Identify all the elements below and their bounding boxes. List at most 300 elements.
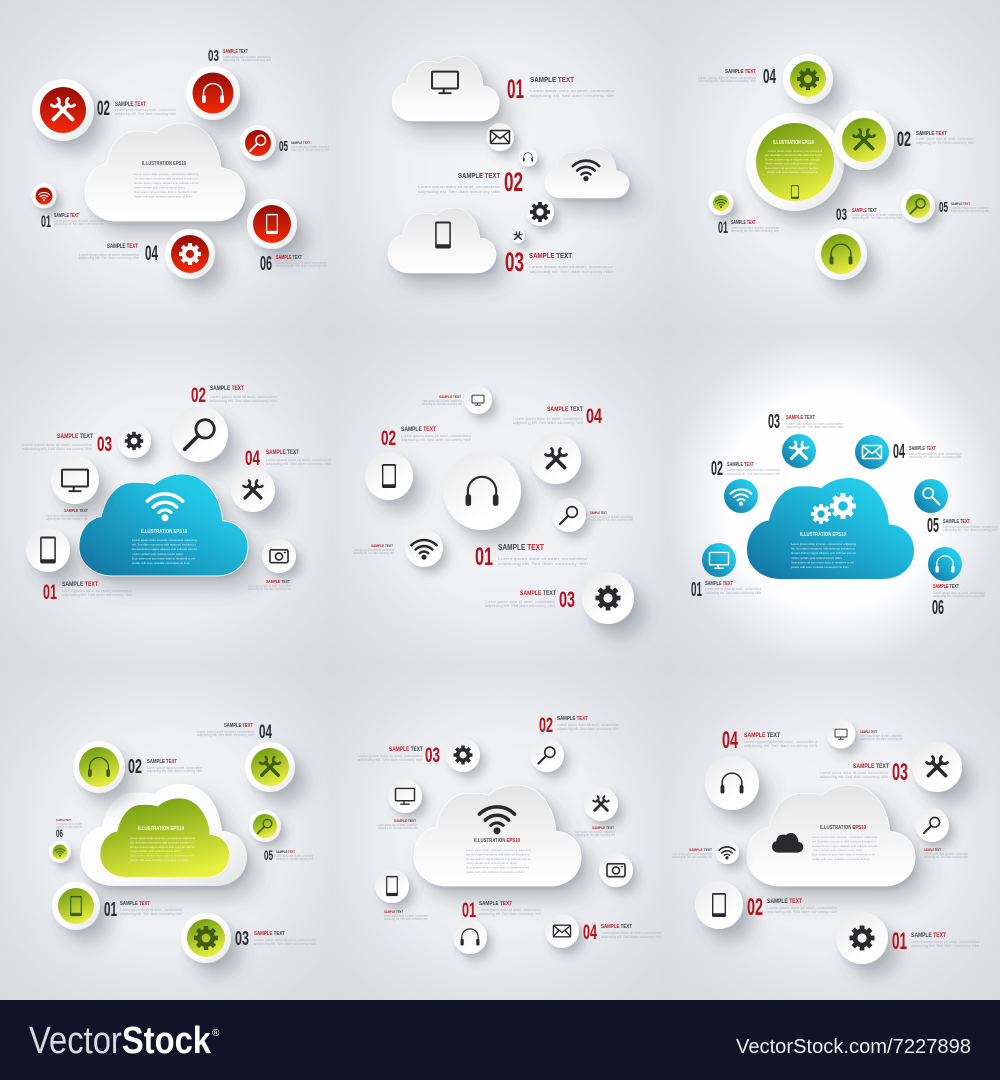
label 01: 01	[507, 74, 524, 104]
cloud: white with green inset: elit. Sed diam nonummy nibh euismod tincidunt ut	[130, 840, 194, 844]
label 02: 02	[128, 756, 142, 778]
icon: gear	[783, 54, 833, 104]
icon: gear	[582, 572, 634, 624]
label 02	[897, 128, 975, 151]
label 01	[475, 543, 589, 571]
icon: search	[552, 498, 586, 532]
label: monitor note	[422, 394, 463, 406]
cloud: white with wifi: elit. Sed diam nonummy nibh euismod tincidunt ut	[466, 852, 530, 856]
label 03: Lorem ipsum dolor sit amet, consectetur	[529, 265, 614, 269]
panel: white cloud with wifi	[333, 667, 667, 1000]
label: phone note: SAMPLE TEXT	[384, 909, 403, 914]
cloud: blue with gears: laoreet dolore magna aliquam erat volutpat wisi ad	[791, 551, 856, 555]
cloud: white with dark cloud icon: laoreet dolore magna aliquam erat volutpat wisi ad	[812, 844, 877, 848]
label 02: SAMPLE TEXT	[147, 759, 177, 765]
label: tools note	[575, 825, 616, 837]
footer url: VectorStock.com/7227898	[736, 1036, 971, 1058]
label 02: 02	[711, 458, 723, 480]
label: search note: adipiscing elit. Sed diam nonummy nibh	[590, 518, 633, 522]
panel: red circles around white cloud	[0, 0, 333, 333]
label 04: SAMPLE TEXT	[224, 723, 253, 729]
label 02: 02	[747, 894, 763, 921]
label 06: adipiscing elit. Sed diam nonummy nibh	[276, 264, 327, 268]
label 01: SAMPLE TEXT	[705, 581, 733, 587]
label 03: Lorem ipsum dolor sit amet, consectetur	[358, 754, 424, 758]
label 05	[939, 199, 990, 216]
label 01: Lorem ipsum dolor sit amet, consectetur	[530, 89, 616, 93]
cloud: white with dark cloud icon: minim veniam quis nostrud exerci tation.	[812, 848, 864, 852]
label 03: 03	[505, 247, 524, 277]
footer bar	[0, 1000, 1000, 1080]
label: monitor note	[378, 818, 419, 830]
icon: gear	[165, 229, 215, 279]
label 02: 02	[539, 714, 553, 737]
label: monitor note: adipiscing elit. Sed diam nonummy nibh	[46, 517, 88, 521]
label 02: adipiscing elit. Sed diam nonummy nibh	[727, 472, 780, 476]
icon: search	[914, 479, 948, 513]
cloud: white with green inset: ILLUSTRATION EPS10	[138, 826, 184, 832]
cloud caption: elit. Sed diam nonummy nibh euismod tincidunt ut	[134, 176, 198, 180]
cloud: white with green inset: Duis autem vel eum iriure dolor in hendrerit in vul	[130, 854, 193, 858]
cloud: blue with gears: putate velit esse molestie consequat vel illum.	[791, 565, 850, 569]
icon: monitor	[826, 720, 856, 748]
label 02: Lorem ipsum dolor sit amet, consectetur	[210, 395, 278, 399]
label: wifi note	[672, 847, 713, 859]
label 02: Lorem ipsum dolor sit amet, consectetur	[557, 723, 620, 727]
label 02: adipiscing elit. Sed diam nonummy nibh	[418, 190, 500, 194]
icon: monitor	[388, 779, 422, 813]
label 02: adipiscing elit. Sed diam nonummy nibh	[916, 141, 974, 145]
label 04: SAMPLE TEXT	[547, 406, 583, 413]
label 01	[41, 212, 105, 231]
big circle with caption: ILLUSTRATION EPS10	[773, 140, 814, 146]
label 03: SAMPLE TEXT	[223, 49, 248, 55]
label: phone note	[384, 909, 429, 921]
label 01	[892, 928, 980, 955]
icon: headphones large	[443, 452, 521, 530]
icon: monitor	[51, 456, 99, 504]
icon: camera	[599, 853, 633, 887]
label 05: 05	[264, 847, 273, 863]
panel: white cloud with cloud icon	[667, 667, 1000, 1000]
label: search note: SAMPLE TEXT	[590, 511, 608, 515]
label 04: adipiscing elit. Sed diam nonummy nibh	[601, 935, 661, 939]
label 01	[718, 218, 780, 237]
label 03: 03	[97, 433, 112, 456]
label 04: Lorem ipsum dolor sit amet, consectetur	[909, 452, 962, 456]
label 03: adipiscing elit. Sed diam nonummy nibh	[786, 425, 843, 429]
cloud: white with dark cloud icon	[747, 785, 915, 886]
label 01: adipiscing elit. Sed diam nonummy nibh	[530, 94, 615, 98]
panel: green cloud: adipiscing elit. Sed diam nonummy nibh	[56, 825, 82, 829]
label 06	[260, 253, 328, 275]
label 03: Lorem ipsum dolor sit amet, consectetur	[22, 443, 93, 447]
label: search note: Lorem ipsum dolor sit amet, consectetur	[590, 515, 634, 519]
label 02: adipiscing elit. Sed diam nonummy nibh	[767, 910, 837, 914]
cloud caption: putate velit esse molestie consequat vel illum.	[134, 194, 193, 198]
cloud: white with wifi: Duis autem vel eum iriure dolor in hendrerit in vul	[466, 866, 529, 870]
cloud: blue center: Duis autem vel eum iriure dolor in hendrerit in vul	[132, 556, 195, 560]
cloud: blue with gears	[747, 478, 914, 579]
label 04: adipiscing elit. Sed diam nonummy nibh	[909, 455, 961, 459]
label 01: Lorem ipsum dolor sit amet, consectetur	[705, 587, 762, 591]
label 01: adipiscing elit. Sed diam nonummy nibh	[54, 222, 104, 226]
label 05: SAMPLE TEXT	[276, 849, 295, 854]
label 05: Lorem ipsum dolor sit amet, consectetur	[291, 145, 330, 149]
label 03: 03	[559, 587, 575, 612]
icon: headphones	[928, 547, 962, 581]
label 01: adipiscing elit. Sed diam nonummy nibh	[479, 912, 541, 916]
label: monitor note: Lorem ipsum dolor sit amet, consectetur	[378, 823, 419, 827]
icon: search	[530, 738, 564, 772]
big circle with caption: Duis autem vel eum iriure dolor in hendrer	[765, 166, 819, 170]
label 02	[747, 894, 838, 921]
label 03	[820, 759, 908, 786]
label 01: Lorem ipsum dolor sit amet, consectetur	[54, 219, 105, 223]
label: phone note: Lorem ipsum dolor sit amet, consectetur	[384, 914, 429, 918]
label 03: SAMPLE TEXT	[389, 747, 423, 753]
label 01: SAMPLE TEXT	[62, 581, 98, 588]
icon: tools	[834, 110, 894, 170]
label: search note: Lorem ipsum dolor sit amet, consectetur	[924, 852, 969, 856]
label 04: 04	[145, 242, 158, 265]
label 01: 01	[462, 899, 476, 922]
label 03: 03	[425, 744, 440, 767]
label 02: SAMPLE TEXT	[767, 898, 802, 905]
icon: tools	[231, 468, 275, 512]
label 04: SAMPLE TEXT	[266, 450, 299, 456]
label 05: Lorem ipsum dolor sit amet, consectetur	[276, 854, 314, 858]
label 02	[381, 426, 472, 450]
label: wifi note: Lorem ipsum dolor sit amet, consectetur	[353, 548, 395, 552]
cloud: wifi	[545, 148, 629, 198]
label 05	[264, 847, 314, 863]
label 05: SAMPLE TEXT	[951, 201, 970, 206]
label 03: 03	[768, 411, 780, 433]
label 02: adipiscing elit. Sed diam nonummy nibh	[557, 727, 619, 731]
cloud caption	[134, 161, 199, 198]
label 03	[208, 48, 272, 65]
label 05: 05	[927, 515, 939, 537]
label 04: 04	[259, 722, 272, 743]
cloud: white with green inset: minim veniam quis nostrud exerci tation.	[130, 849, 182, 853]
big circle with caption: elit. Sed diam nonummy nibh euismod tincid	[765, 153, 822, 157]
label 03: 03	[208, 48, 219, 65]
cloud: white with green inset: Lorem ipsum dolor sit amet, consectetur adipiscing	[130, 836, 195, 840]
cloud: blue center: elit. Sed diam nonummy nibh euismod tincidunt ut	[132, 543, 196, 547]
label: wifi note: adipiscing elit. Sed diam nonummy nibh	[353, 551, 394, 555]
cloud: white with dark cloud icon: elit. Sed diam nonummy nibh euismod tincidunt ut	[812, 839, 876, 843]
label 01: SAMPLE TEXT	[479, 901, 513, 907]
label 02: 02	[191, 384, 206, 407]
label 03: SAMPLE TEXT	[57, 433, 93, 440]
label: wifi note: adipiscing elit. Sed diam nonummy nibh	[672, 855, 712, 859]
label: tools note: adipiscing elit. Sed diam nonummy nibh	[575, 833, 615, 837]
label 05: 05	[939, 199, 948, 216]
cloud: white with dark cloud icon: Duis autem vel eum iriure dolor in hendrerit in vul	[812, 853, 875, 857]
icon: phone	[365, 452, 413, 500]
label 02: Lorem ipsum dolor sit amet, consectetur	[401, 434, 472, 438]
label: tools note: SAMPLE TEXT	[592, 825, 614, 830]
icon: wifi	[708, 190, 734, 216]
cloud: blue with gears: minim veniam quis nostrud exerci tation.	[791, 556, 843, 560]
icon: headphones	[73, 741, 125, 793]
icon: search	[172, 406, 228, 462]
label 02: Lorem ipsum dolor sit amet, consectetur	[115, 108, 177, 112]
label 04: adipiscing elit. Sed diam nonummy nibh	[79, 256, 139, 260]
label 05: adipiscing elit. Sed diam nonummy nibh	[291, 148, 329, 152]
label 04: 04	[245, 447, 260, 470]
label 03	[358, 744, 440, 767]
cloud: blue center: laoreet dolore magna aliquam erat volutpat wisi ad	[132, 547, 197, 551]
label: monitor note	[46, 508, 89, 521]
icon: monitor	[464, 386, 492, 414]
label 03: SAMPLE TEXT	[852, 208, 877, 214]
icon: wifi	[32, 184, 56, 208]
label: monitor note: adipiscing elit. Sed diam nonummy nibh	[422, 402, 462, 406]
label 06: 06	[932, 597, 944, 619]
label: tools note: Lorem ipsum dolor sit amet, consectetur	[575, 830, 616, 834]
label: search note: adipiscing elit. Sed diam nonummy nibh	[924, 855, 968, 859]
label 05: 05	[279, 138, 288, 155]
icon: phone	[26, 528, 70, 572]
cloud: white with wifi: laoreet dolore magna aliquam erat volutpat wisi ad	[466, 857, 531, 861]
label 02	[97, 97, 177, 120]
cloud: monitor	[392, 56, 499, 121]
label 01	[462, 899, 542, 922]
big circle with caption: minim veniam quis nostrud exerci tation	[765, 162, 816, 166]
label 01: 01	[475, 543, 493, 571]
label 04: Lorem ipsum dolor sit amet, consectetur	[266, 458, 332, 462]
label 03: SAMPLE TEXT	[529, 251, 572, 260]
cloud caption: laoreet dolore magna aliquam erat volutpat wisi ad	[134, 181, 199, 185]
icon: phone	[695, 881, 743, 929]
label 05: adipiscing elit. Sed diam nonummy nibh	[943, 528, 998, 532]
label 03	[768, 411, 844, 433]
label 04: 04	[583, 921, 597, 944]
label 04	[893, 441, 962, 463]
panel: blue cloud with white circles	[0, 333, 333, 667]
label 06: 06	[56, 828, 63, 840]
icon: tools	[912, 742, 962, 792]
label 02: Lorem ipsum dolor sit amet, consectetur	[727, 468, 781, 472]
icon: gear	[526, 198, 554, 226]
label 03	[505, 247, 614, 277]
label: monitor note	[860, 730, 904, 741]
label 04: adipiscing elit. Sed diam nonummy nibh	[197, 733, 254, 737]
label 01: 01	[104, 899, 117, 921]
icon: search	[915, 808, 949, 842]
label 01: Lorem ipsum dolor sit amet, consectetur	[498, 557, 589, 561]
label 02	[711, 458, 781, 480]
panel: blue cloud with blue circles	[667, 333, 1000, 667]
cloud: white with wifi: putate velit esse molestie consequat vel illum.	[466, 870, 525, 874]
cloud: white center	[85, 123, 245, 221]
icon: tools	[584, 787, 618, 821]
icon: monitor	[702, 543, 736, 577]
label 02: SAMPLE TEXT	[401, 426, 436, 433]
label 03: 03	[836, 205, 847, 224]
icon: mail	[855, 435, 889, 469]
label 04: 04	[722, 727, 738, 754]
cloud: white with green inset	[80, 784, 247, 886]
icon: search	[249, 810, 281, 842]
label 01: SAMPLE TEXT	[120, 901, 150, 907]
label 03	[22, 433, 112, 456]
cloud: blue with gears: ILLUSTRATION EPS10	[800, 532, 846, 538]
label 03: SAMPLE TEXT	[853, 763, 889, 770]
label 02: adipiscing elit. Sed diam nonummy nibh	[147, 769, 202, 773]
cloud: white with wifi: minim veniam quis nostrud exerci tation.	[466, 861, 518, 865]
footer logo: VectorStock	[29, 1020, 212, 1062]
label: wifi note	[353, 543, 395, 555]
label 04: Lorem ipsum dolor sit amet, consectetur	[698, 76, 757, 80]
panel: white circles around headphones	[333, 333, 667, 667]
icon: wifi	[715, 840, 739, 864]
label 01: SAMPLE TEXT	[911, 932, 946, 939]
label 04	[513, 405, 602, 428]
label: search note: SAMPLE TEXT	[924, 848, 942, 852]
cloud: white with dark cloud icon: putate velit esse molestie consequat vel illum.	[812, 857, 871, 861]
cloud caption: minim veniam quis nostrud exerci tation.	[134, 186, 186, 190]
label 02	[128, 756, 203, 778]
big circle with caption: Lorem ipsum dolor sit amet, consectetur a	[768, 149, 822, 153]
icon: headphones	[518, 148, 538, 166]
label 01: 01	[892, 928, 907, 955]
label 02	[418, 167, 523, 197]
icon: phone	[375, 869, 409, 903]
icon: search	[901, 189, 935, 223]
label 03: adipiscing elit. Sed diam nonummy nibh	[254, 942, 316, 946]
label 04: SAMPLE TEXT	[725, 69, 757, 75]
label 06: SAMPLE TEXT	[56, 818, 71, 822]
icon: search	[240, 125, 276, 161]
label 06: adipiscing elit. Sed diam nonummy nibh	[933, 594, 985, 598]
icon: tools	[531, 434, 581, 484]
label 01: adipiscing elit. Sed diam nonummy nibh	[498, 562, 588, 566]
label 02: Lorem ipsum dolor sit amet, consectetur	[767, 906, 838, 910]
label 01	[104, 899, 183, 921]
label 05: SAMPLE TEXT	[291, 140, 310, 145]
label 01: Lorem ipsum dolor sit amet, consectetur	[731, 226, 780, 230]
label 02: adipiscing elit. Sed diam nonummy nibh	[401, 438, 471, 442]
cloud: phone	[388, 208, 496, 273]
label 02: SAMPLE TEXT	[557, 716, 589, 722]
icon: gear	[446, 738, 480, 772]
panel: green cloud: Lorem ipsum dolor sit amet, consectetur	[56, 822, 82, 826]
label 04: 04	[763, 66, 777, 88]
label 05	[927, 515, 999, 537]
label: monitor note: SAMPLE TEXT	[394, 818, 416, 823]
footer logo: ®	[212, 1028, 220, 1039]
label 04: SAMPLE TEXT	[601, 924, 633, 930]
icon: camera	[262, 539, 296, 573]
label 06: Lorem ipsum dolor sit amet, consectetur	[933, 591, 986, 595]
label 02: SAMPLE TEXT	[458, 171, 500, 180]
icon: wifi	[49, 841, 71, 863]
label 06	[932, 584, 986, 619]
label 01: adipiscing elit. Sed diam nonummy nibh	[705, 591, 761, 595]
label 04: Lorem ipsum dolor sit amet, consectetur	[197, 730, 255, 734]
label 03: SAMPLE TEXT	[254, 931, 286, 937]
label 02: SAMPLE TEXT	[916, 131, 948, 137]
label 01: SAMPLE TEXT	[731, 220, 756, 226]
label 03: Lorem ipsum dolor sit amet, consectetur	[820, 771, 889, 775]
cloud: white with dark cloud icon: Lorem ipsum dolor sit amet, consectetur adipiscing	[812, 835, 877, 839]
icon: gear	[836, 912, 888, 964]
label 04: SAMPLE TEXT	[909, 446, 936, 452]
cloud: blue with gears: Duis autem vel eum iriure dolor in hendrerit in vul	[791, 560, 854, 564]
label 02: 02	[897, 128, 911, 151]
label 01: SAMPLE TEXT	[54, 213, 79, 219]
icon: wifi	[724, 479, 758, 513]
label 04	[245, 447, 332, 470]
label 05: adipiscing elit. Sed diam nonummy nibh	[276, 857, 313, 861]
label 02: Lorem ipsum dolor sit amet, consectetur	[916, 137, 975, 141]
label: monitor note: adipiscing elit. Sed diam nonummy nibh	[378, 826, 418, 830]
label: monitor note: adipiscing elit. Sed diam nonummy nibh	[860, 737, 903, 741]
label 04	[698, 66, 777, 88]
label 04: Lorem ipsum dolor sit amet, consectetur	[513, 417, 584, 421]
label 04: Lorem ipsum dolor sit amet, consectetur	[744, 740, 818, 744]
label 01: SAMPLE TEXT	[530, 75, 574, 84]
cloud caption: ILLUSTRATION EPS10	[142, 161, 186, 167]
label 04: SAMPLE TEXT	[107, 244, 138, 250]
label 01: SAMPLE TEXT	[498, 543, 544, 552]
label 03	[836, 205, 903, 224]
label 04: adipiscing elit. Sed diam nonummy nibh	[513, 421, 583, 425]
cloud: blue center: ILLUSTRATION EPS10	[141, 529, 187, 535]
label 01: 01	[43, 581, 57, 604]
label: camera note: SAMPLE TEXT	[266, 579, 290, 584]
label 03: Lorem ipsum dolor sit amet, consectetur	[223, 55, 272, 59]
icon: gear	[117, 424, 151, 458]
label 03: adipiscing elit. Sed diam nonummy nibh	[820, 775, 888, 779]
label 05: SAMPLE TEXT	[943, 519, 970, 525]
cloud caption: Duis autem vel eum iriure dolor in hendrerit in vul	[134, 190, 197, 194]
cloud: blue with gears: elit. Sed diam nonummy nibh euismod tincidunt ut	[791, 547, 855, 551]
label: camera note: Lorem ipsum dolor sit amet, consectetur	[248, 584, 292, 588]
label 03: Lorem ipsum dolor sit amet, consectetur	[254, 938, 317, 942]
label: wifi note: SAMPLE TEXT	[689, 847, 712, 852]
icon: headphones	[186, 66, 240, 120]
label 04: SAMPLE TEXT	[744, 732, 780, 739]
label 02: 02	[97, 97, 110, 120]
label 06: 06	[260, 253, 272, 275]
icon: tools	[32, 79, 94, 141]
label 02	[191, 384, 278, 407]
icon: tools	[245, 742, 295, 792]
label 03: adipiscing elit. Sed diam nonummy nibh	[223, 58, 271, 62]
cloud: white with wifi: ILLUSTRATION EPS10	[474, 838, 520, 844]
label 03: adipiscing elit. Sed diam nonummy nibh	[22, 447, 92, 451]
label: monitor note: SAMPLE TEXT	[439, 394, 461, 399]
cloud: white with wifi	[414, 785, 581, 886]
label: camera note: adipiscing elit. Sed diam nonummy nibh	[248, 587, 291, 591]
label: phone note: adipiscing elit. Sed diam nonummy nibh	[384, 917, 428, 921]
label 02: Lorem ipsum dolor sit amet, consectetur	[147, 766, 203, 770]
label 01: 01	[718, 218, 728, 237]
icon: headphones	[453, 920, 487, 954]
label 03: Lorem ipsum dolor sit amet, consectetur	[786, 422, 844, 426]
label 02: SAMPLE TEXT	[115, 102, 146, 108]
label 01: Lorem ipsum dolor sit amet, consectetur	[120, 908, 183, 912]
label 05: Lorem ipsum dolor sit amet, consectetur	[943, 525, 999, 529]
label 01	[691, 579, 762, 601]
label: search note	[924, 848, 969, 859]
label 02	[539, 714, 620, 737]
label 03: adipiscing elit. Sed diam nonummy nibh	[529, 270, 613, 274]
